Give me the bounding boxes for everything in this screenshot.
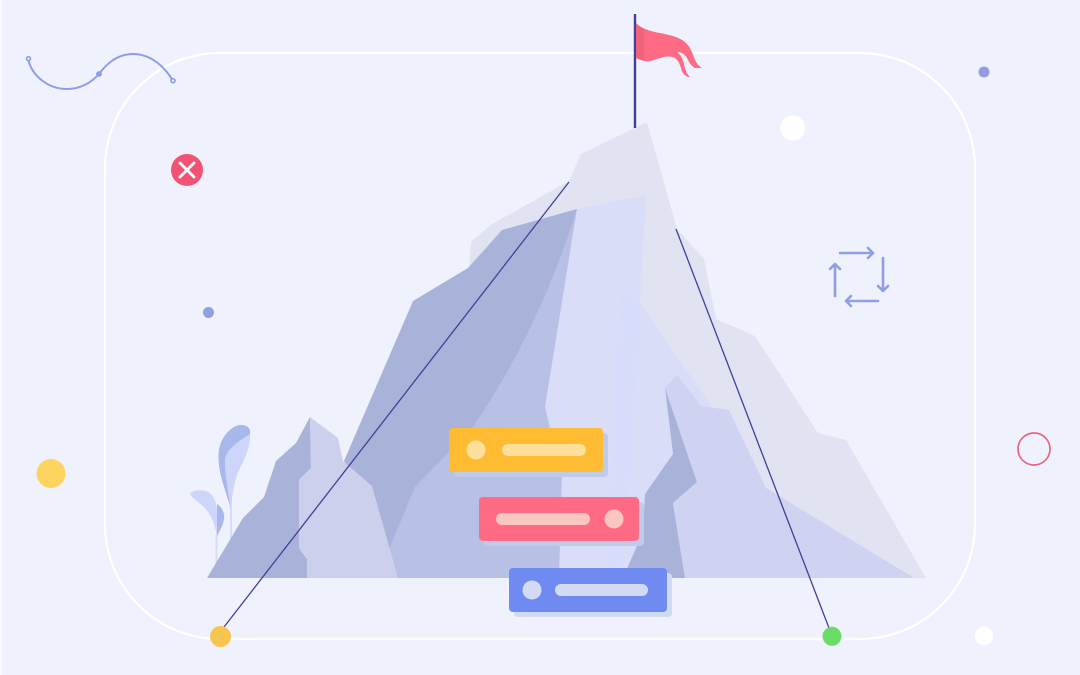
plants bbox=[190, 425, 250, 565]
red outline ring bbox=[1018, 433, 1050, 465]
dark left face bbox=[344, 209, 577, 547]
left guide line bbox=[224, 182, 569, 627]
tall plant bbox=[218, 425, 250, 543]
icon: cycle arrows bbox=[830, 248, 888, 306]
rounded white frame bbox=[105, 53, 975, 639]
back mountain bbox=[420, 122, 926, 578]
right guide line bbox=[676, 229, 829, 628]
red task card bbox=[479, 497, 644, 546]
yellow dot left bbox=[36, 459, 66, 488]
right foreground peak bbox=[665, 375, 914, 578]
flag shaded edge bbox=[636, 23, 644, 60]
decorative curve with nodes bbox=[26, 54, 175, 89]
dark right ridge bbox=[623, 388, 697, 578]
small blue dot left bbox=[203, 307, 214, 318]
mid-tone face bbox=[385, 209, 577, 578]
green endpoint dot bbox=[822, 627, 842, 646]
yellow task card bbox=[449, 428, 608, 477]
left foreground peak dark side bbox=[207, 417, 311, 578]
white dot bottom right bbox=[975, 627, 993, 645]
blue task card bbox=[509, 568, 672, 617]
white dot near summit bbox=[780, 116, 805, 140]
small blue dot top right bbox=[978, 66, 990, 78]
flag bbox=[634, 14, 702, 128]
orange endpoint dot bbox=[210, 626, 231, 647]
small plant bbox=[190, 490, 224, 565]
flag pole bbox=[634, 14, 636, 128]
left foreground peak light side bbox=[299, 417, 398, 578]
pale vertical strip bbox=[606, 287, 640, 578]
light central face bbox=[545, 195, 800, 578]
flag cloth bbox=[636, 23, 702, 77]
icon: red close badge bbox=[171, 154, 203, 186]
mountain bbox=[207, 122, 926, 578]
